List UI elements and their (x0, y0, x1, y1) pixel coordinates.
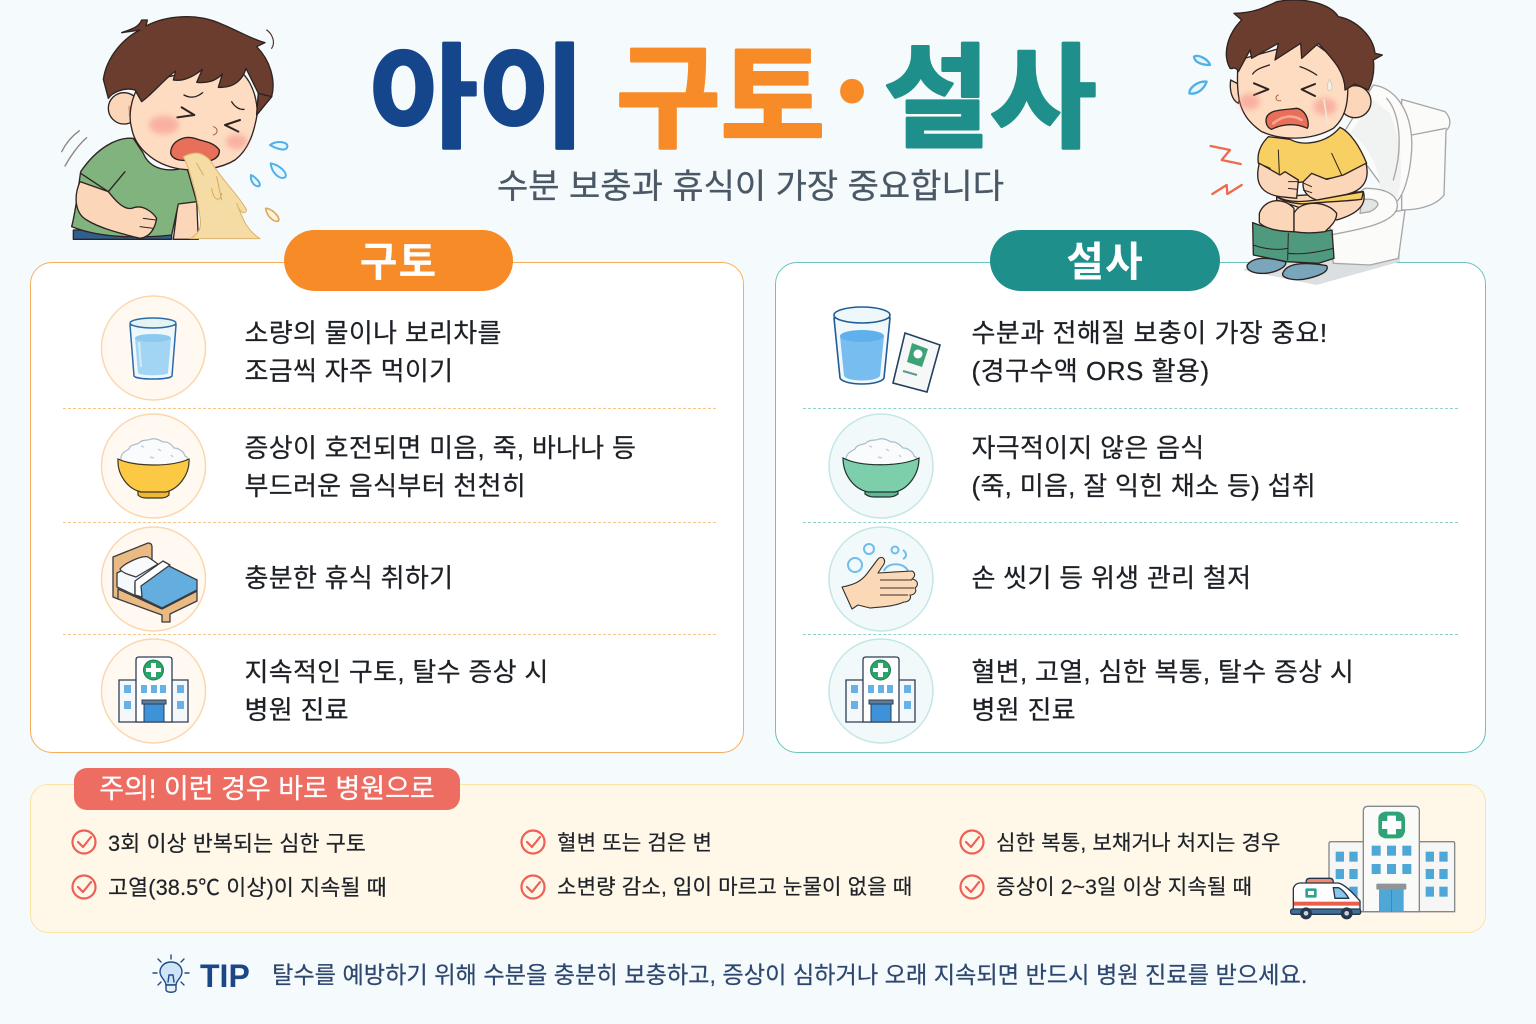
text: vomiting item 1 (244, 318, 502, 386)
icon: hospital and ambulance (1290, 806, 1456, 920)
icon: hand washing (828, 526, 934, 632)
badge: vomiting heading: 구토 (360, 239, 437, 285)
check icon (520, 829, 546, 855)
check icon (959, 829, 985, 855)
text: vomiting item 1: 조금씩 자주 먹이기 (244, 356, 453, 386)
icon: rice bowl green (828, 413, 934, 519)
warning text: 3회 이상 반복되는 심한 구토 (108, 831, 366, 856)
icon: glass of water (100, 295, 206, 401)
text: vomiting item 4 (244, 657, 549, 725)
illustration: vomiting boy (61, 16, 288, 240)
warning text: 혈변 또는 검은 변 (557, 832, 712, 855)
text: diarrhea item 3: 손 씻기 등 위생 관리 철저 (972, 563, 1251, 593)
badge: warning heading: 주의! 이런 경우 바로 병원으로 (99, 774, 435, 804)
subtitle: 수분 보충과 휴식이 가장 중요합니다 (497, 168, 1004, 206)
check icon (959, 874, 985, 900)
illustration: boy on toilet (1188, 0, 1450, 285)
text: vomiting item 4: 지속적인 구토, 탈수 증상 시 (244, 657, 549, 687)
warning text: 소변량 감소, 입이 마르고 눈물이 없을 때 (557, 876, 912, 899)
text: vomiting item 1: 소량의 물이나 보리차를 (244, 318, 502, 348)
tip label: TIP (200, 958, 250, 994)
text: vomiting item 4: 병원 진료 (244, 695, 349, 725)
warning list: column 2 (520, 829, 912, 900)
text: diarrhea item 2: 자극적이지 않은 음식 (972, 433, 1205, 463)
check icon (520, 874, 546, 900)
panel: warning (30, 784, 1486, 933)
text: diarrhea item 2 (972, 433, 1316, 501)
text: diarrhea item 4 (972, 657, 1354, 725)
warning text: 증상이 2~3일 이상 지속될 때 (996, 876, 1252, 899)
text: vomiting item 2: 부드러운 음식부터 천천히 (244, 471, 526, 501)
text: diarrhea item 4: 병원 진료 (972, 695, 1076, 725)
text: diarrhea item 1: 수분과 전해질 보충이 가장 중요! (972, 318, 1328, 348)
text: vomiting item 2: 증상이 호전되면 미음, 죽, 바나나 등 (244, 433, 636, 463)
title: 설사 (884, 36, 1096, 162)
text: diarrhea item 4: 혈변, 고열, 심한 복통, 탈수 증상 시 (972, 657, 1354, 687)
badge: diarrhea heading (990, 230, 1220, 291)
title: 아이 (370, 36, 586, 162)
check icon (71, 874, 97, 900)
icon: glass and ORS sachet (833, 306, 941, 393)
icon: bed (100, 526, 206, 632)
text: diarrhea item 2: (죽, 미음, 잘 익힌 채소 등) 섭취 (972, 471, 1316, 501)
text: vomiting item 2 (244, 433, 636, 501)
text: vomiting item 3: 충분한 휴식 취하기 (244, 563, 453, 593)
icon: hospital left (100, 638, 206, 744)
warning list: column 1 (71, 829, 387, 900)
title: 구토 (616, 36, 825, 162)
warning text: 심한 복통, 보채거나 처지는 경우 (996, 832, 1281, 855)
icon: light bulb (152, 954, 190, 993)
panel: diarrhea (775, 262, 1486, 753)
panel: vomiting (30, 262, 744, 753)
text: diarrhea item 1 (972, 318, 1328, 386)
icon: hospital right (828, 638, 934, 744)
text: diarrhea item 1: (경구수액 ORS 활용) (972, 356, 1210, 386)
warning list: column 3 (959, 829, 1281, 900)
warning text: 고열(38.5℃ 이상)이 지속될 때 (108, 875, 387, 900)
check icon (71, 829, 97, 855)
badge: warning heading (74, 768, 460, 810)
badge: vomiting heading (284, 230, 513, 291)
title (370, 3, 1096, 167)
icon: rice bowl yellow (100, 413, 206, 519)
badge: diarrhea heading: 설사 (1066, 239, 1144, 285)
tip text: 탈수를 예방하기 위해 수분을 충분히 보충하고, 증상이 심하거나 오래 지속되면 반드시 병원 진료를 받으세요. (272, 962, 1307, 988)
title: · (834, 3, 870, 167)
